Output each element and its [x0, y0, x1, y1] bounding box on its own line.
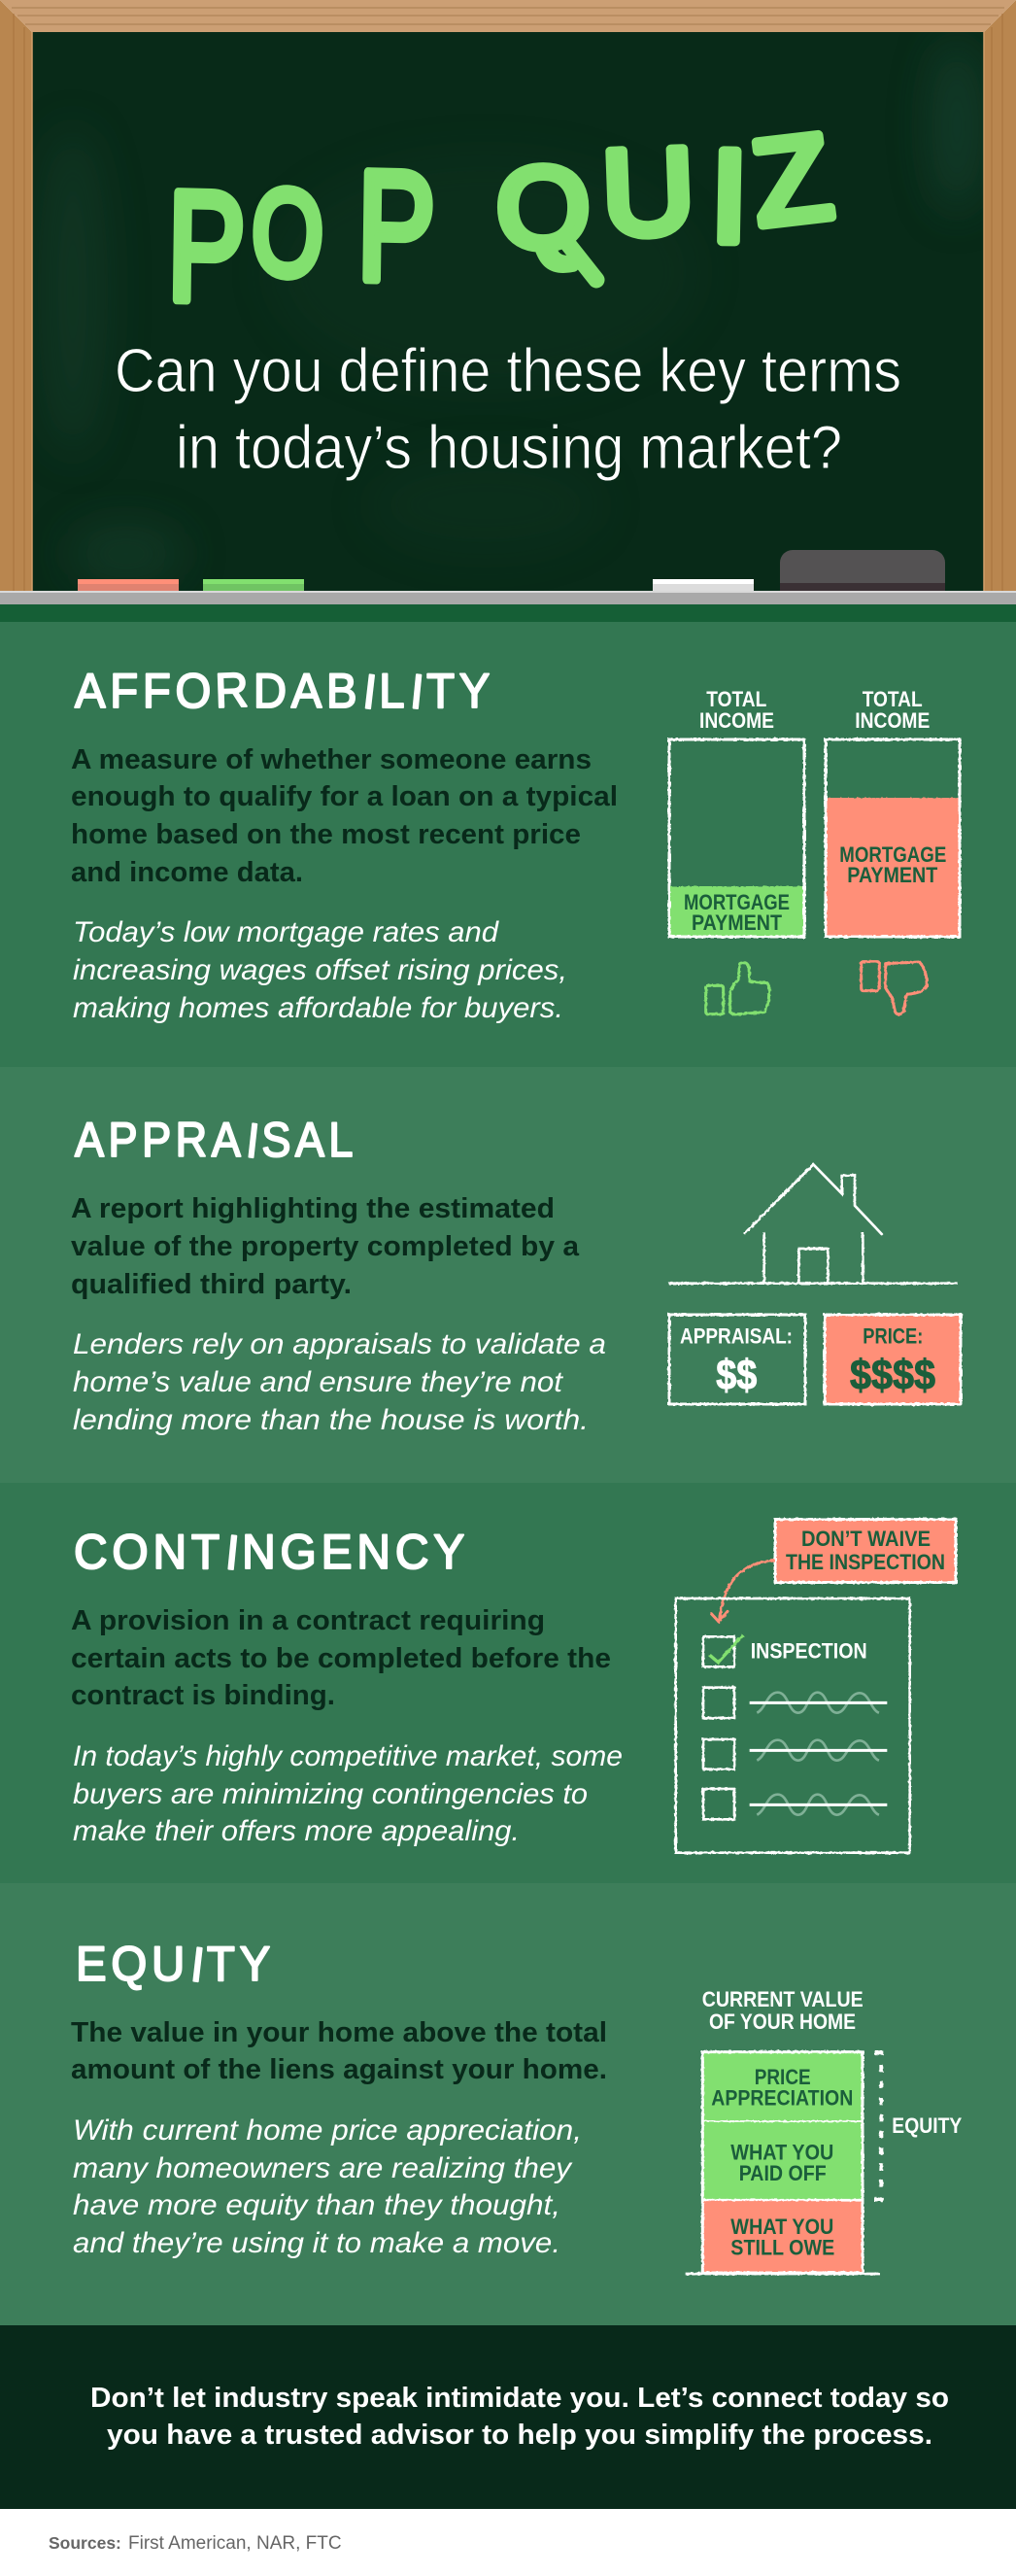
- total income labels: INCOME: [855, 708, 930, 733]
- heading: APPRAISAL: [75, 1113, 357, 1169]
- explanation: lending more than the house is worth.: [73, 1404, 589, 1436]
- total income labels: TOTAL: [706, 687, 766, 711]
- definition: value of the property completed by a: [71, 1231, 580, 1262]
- heading: CONTINGENCY: [74, 1525, 469, 1581]
- title: POP QUIZ: P: [166, 158, 247, 334]
- section background: [0, 1067, 1016, 1483]
- explanation: [73, 916, 567, 1024]
- payment labels: MORTGAGE: [684, 890, 790, 914]
- subtitle: [115, 337, 901, 482]
- call to action text: Don’t let industry speak intimidate you. Let’s connect today so: [90, 2383, 949, 2414]
- value labels: $$$$: [850, 1352, 935, 1399]
- definition: contract is binding.: [71, 1680, 335, 1711]
- icon: house: [668, 1164, 958, 1284]
- sources: Sources:: [49, 2533, 126, 2553]
- subtitle: in today’s housing market?: [176, 414, 842, 482]
- heading: EQUITY: [76, 1937, 275, 1993]
- explanation: making homes affordable for buyers.: [73, 992, 563, 1024]
- callout text: [786, 1527, 945, 1574]
- icon: thumbs up: [706, 963, 769, 1014]
- explanation: With current home price appreciation,: [73, 2114, 582, 2147]
- inspection label: INSPECTION: [751, 1639, 867, 1664]
- value labels: APPRAISAL:: [680, 1324, 793, 1349]
- box: unaffordable payment: [826, 739, 960, 937]
- icon: thumbs down: [862, 962, 927, 1014]
- section background: [0, 1883, 1016, 2325]
- icon: green check mark: [710, 1635, 743, 1663]
- heading: AFFORDABILITY: [75, 663, 494, 720]
- title: POP QUIZ: O: [250, 163, 325, 303]
- callout text: THE INSPECTION: [786, 1550, 945, 1574]
- checklist frame and boxes: [676, 1598, 910, 1853]
- panel: equity: [0, 1883, 1016, 2325]
- equity label: EQUITY: [892, 2113, 963, 2138]
- explanation: make their offers more appealing.: [73, 1815, 520, 1847]
- coral chalk: [78, 579, 179, 591]
- definition: A measure of whether someone earns: [71, 744, 592, 775]
- value labels: [680, 1324, 935, 1399]
- stack labels: WHAT YOU: [730, 2215, 833, 2239]
- stack labels: STILL OWE: [730, 2236, 834, 2260]
- panel: affordability: [0, 622, 1016, 1067]
- panel: call to action: [0, 2325, 1016, 2509]
- title: POP QUIZ: Q: [496, 145, 590, 271]
- definition: enough to qualify for a loan on a typical: [71, 781, 618, 812]
- explanation: have more equity than they thought,: [73, 2189, 560, 2221]
- definition: [71, 744, 618, 888]
- callout text: DON’T WAIVE: [801, 1527, 931, 1551]
- explanation: [73, 1328, 606, 1436]
- title: POP QUIZ: P: [356, 138, 436, 314]
- explanation: increasing wages offset rising prices,: [73, 954, 567, 986]
- definition: [71, 1605, 611, 1711]
- chart: home value stack: [686, 1987, 963, 2274]
- stack labels: [711, 2065, 853, 2260]
- explanation: [73, 1740, 623, 1847]
- chalk ledge: [0, 591, 1016, 604]
- chart title: [702, 1987, 864, 2034]
- box: appraisal value: [669, 1315, 805, 1404]
- payment labels: PAYMENT: [692, 910, 782, 935]
- ledge shadow strip: [0, 604, 1016, 622]
- explanation: buyers are minimizing contingencies to: [73, 1778, 588, 1810]
- explanation: many homeowners are realizing they: [73, 2152, 573, 2184]
- payment labels: [684, 842, 946, 935]
- call to action text: you have a trusted advisor to help you simplify the process.: [107, 2420, 932, 2451]
- chart title: OF YOUR HOME: [709, 2009, 856, 2034]
- definition: amount of the liens against your home.: [71, 2054, 607, 2085]
- panel: contingency: [0, 1483, 1016, 1883]
- chart title: CURRENT VALUE: [702, 1987, 864, 2011]
- definition: [71, 2017, 607, 2085]
- illustration: house and value comparison: [668, 1164, 961, 1404]
- eraser: [780, 550, 945, 591]
- chart: income versus payment boxes: [669, 687, 960, 1014]
- value labels: $$: [716, 1352, 757, 1399]
- white chalk: [653, 579, 754, 591]
- total income labels: TOTAL: [863, 687, 923, 711]
- definition: and income data.: [71, 857, 303, 888]
- subtitle: Can you define these key terms: [115, 337, 901, 405]
- wood frame: [0, 0, 1016, 591]
- box: price: [825, 1315, 961, 1404]
- definition: home based on the most recent price: [71, 819, 581, 850]
- payment labels: MORTGAGE: [839, 842, 946, 867]
- payment labels: PAYMENT: [847, 863, 938, 887]
- definition: A report highlighting the estimated: [71, 1193, 555, 1224]
- sources: First American, NAR, FTC: [128, 2533, 342, 2554]
- section background: [0, 622, 1016, 1067]
- definition: A provision in a contract requiring: [71, 1605, 545, 1636]
- illustration: inspection checklist: [676, 1520, 956, 1853]
- definition: [71, 1193, 580, 1300]
- call to action text: [90, 2383, 949, 2451]
- panel: appraisal: [0, 1067, 1016, 1483]
- title: POP QUIZ: [166, 108, 839, 334]
- explanation: home’s value and ensure they’re not: [73, 1366, 564, 1398]
- explanation: In today’s highly competitive market, some: [73, 1740, 623, 1772]
- explanation: Lenders rely on appraisals to validate a: [73, 1328, 606, 1360]
- explanation: and they’re using it to make a move.: [73, 2227, 560, 2259]
- explanation: Today’s low mortgage rates and: [73, 916, 500, 948]
- chalkboard surface: [32, 32, 984, 591]
- title: POP QUIZ: Z: [745, 108, 839, 251]
- definition: qualified third party.: [71, 1269, 352, 1300]
- callout box: [775, 1520, 956, 1582]
- title: POP QUIZ: U: [599, 123, 696, 261]
- definition: The value in your home above the total: [71, 2017, 607, 2048]
- banner background: [0, 2325, 1016, 2509]
- definition: certain acts to be completed before the: [71, 1643, 611, 1674]
- scribble lines: [750, 1693, 887, 1815]
- stack labels: APPRECIATION: [711, 2086, 853, 2111]
- total income labels: [699, 687, 930, 733]
- stack labels: WHAT YOU: [730, 2141, 833, 2165]
- value labels: PRICE:: [863, 1324, 923, 1349]
- stacked bar: [686, 2052, 880, 2274]
- title: POP QUIZ: I: [709, 123, 750, 270]
- stack labels: PAID OFF: [739, 2161, 827, 2185]
- panel: chalkboard header: [0, 0, 1016, 604]
- dashed equity bracket: [874, 2050, 883, 2202]
- arrow: callout to first checkbox: [711, 1561, 774, 1622]
- green chalk: [203, 579, 304, 591]
- box: affordable payment: [669, 739, 804, 937]
- explanation: [73, 2114, 582, 2259]
- total income labels: INCOME: [699, 708, 774, 733]
- section background: [0, 1483, 1016, 1883]
- stack labels: PRICE: [755, 2065, 811, 2089]
